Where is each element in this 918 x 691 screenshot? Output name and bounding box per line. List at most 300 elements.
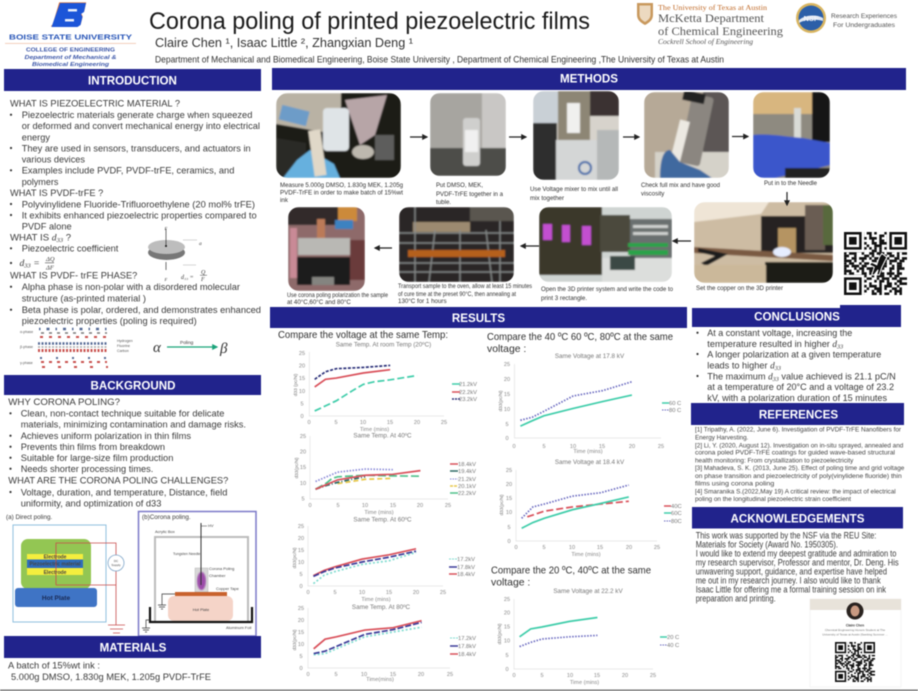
- chart: same voltage 17.8 kV: 5: [542, 444, 546, 450]
- chart: 60C voltage comparison: 17.8kV: [457, 565, 475, 571]
- diagram: corona poling: Aluminum Foil: [226, 625, 251, 630]
- chart: 80C voltage comparison: Time(mins): [366, 677, 394, 683]
- text: conclusions: A longer polarization at a given temperature: [707, 350, 881, 360]
- chart: 40C voltage comparison: Time (mins): [364, 510, 394, 516]
- text: background: WHY CORONA POLING?: [8, 397, 120, 408]
- diagram: corona poling: (b)Corona poling.: [142, 514, 191, 521]
- chart: 60C voltage comparison: 17.2kV: [457, 557, 475, 563]
- logo: Boise State University: Department of Mechanical &: [24, 55, 117, 61]
- text: introduction: 33: [56, 237, 64, 244]
- text: introduction: WHAT IS PVDF- trFE PHASE?: [10, 271, 137, 282]
- photo: printer software screen: [539, 207, 672, 282]
- chart: same voltage 22.2 kV: 5: [540, 673, 544, 679]
- diagram: d33 disk: F: [200, 277, 205, 283]
- diagram: corona poling: Tungsten Needle: [173, 552, 200, 556]
- chart: same voltage 22.2 kV: 10: [567, 673, 573, 679]
- chart: same voltage 22.2 kV: 40 C: [667, 643, 679, 649]
- heading: compare temperatures: [487, 332, 673, 355]
- heading: compare 20C and 40C: voltage :: [491, 578, 530, 588]
- chart: 20C voltage comparison: d33 (pc/N): [293, 373, 299, 396]
- program label: [831, 13, 898, 29]
- photo: syringe needle: [753, 92, 830, 178]
- text: acknowledgements: Isaac Little for offering me a formal training session on ink: [696, 584, 887, 594]
- chart: same voltage 17.8 kV: 60 C: [669, 401, 681, 407]
- chart: 20C voltage comparison: 20: [299, 364, 305, 370]
- chart: same voltage 18.4 kV: 5: [507, 525, 511, 531]
- text: introduction: d: [20, 258, 24, 269]
- text: conclusions: leads to higher d: [707, 360, 775, 370]
- chart: same voltage 18.4 kV: 80C: [671, 519, 682, 525]
- chart: same voltage 22.2 kV: 20: [622, 673, 628, 679]
- chart: 40C voltage comparison: 10: [300, 481, 306, 487]
- text: background: uniformity, and optimization of d33: [21, 498, 161, 509]
- chart: 40C voltage comparison: 5: [301, 496, 305, 502]
- text: introduction: Piezoelectric coefficient: [22, 244, 119, 255]
- diagram: direct poling: DC: [114, 559, 119, 563]
- chart: 40C voltage comparison: Same Temp. At 40ºC: [353, 432, 412, 440]
- chart: same voltage 22.2 kV: 15: [594, 673, 600, 679]
- heading: references: [691, 403, 904, 425]
- chart: 20C voltage comparison: 23.2kV: [459, 397, 477, 403]
- diagram: direct poling: Supply: [111, 563, 121, 567]
- text: background: Needs shorter processing times.: [21, 464, 153, 475]
- diagram: PVDF-TrFE molecular phases: Hydrogen: [117, 339, 133, 343]
- profile card: [810, 599, 901, 687]
- captions: process steps: ink: [280, 197, 289, 204]
- diagram: direct poling: (a) Direct poling.: [6, 514, 52, 521]
- chart: same voltage 18.4 kV: 20: [506, 482, 512, 488]
- heading: results: [270, 307, 687, 328]
- chart: 80C voltage comparison: [292, 604, 476, 683]
- text: materials: [8, 660, 211, 683]
- chart: same voltage 17.8 kV: 20: [504, 377, 510, 383]
- chart: 60C voltage comparison: 20: [413, 590, 419, 596]
- text: materials: 5.000g DMSO, 1.830g MEK, 1.205g PVDF-TrFE: [11, 672, 211, 683]
- chart: same voltage 17.8 kV: [498, 353, 681, 455]
- text: acknowledgements: This work was supported by the NSF via the REU Site:: [696, 530, 876, 540]
- text: introduction: structure (as-printed material ): [22, 294, 146, 305]
- chart: same voltage 17.8 kV: 20: [629, 444, 635, 450]
- text: introduction: WHAT IS PIEZOELECTRIC MATERIAL ?: [10, 99, 180, 110]
- heading: methods: METHODS: [560, 72, 618, 86]
- chart: same voltage 17.8 kV: 0: [505, 436, 509, 442]
- chart: same voltage 18.4 kV: [499, 459, 682, 558]
- chart: 40C voltage comparison: 18.4kV: [458, 462, 476, 468]
- chart: 20C voltage comparison: Same Temp. At room Temp (20ºC): [336, 342, 431, 348]
- captions: process steps: PVDF-TrFE together in a: [436, 191, 504, 198]
- photo: measuring materials: [276, 93, 401, 178]
- chart: 40C voltage comparison: 25: [300, 434, 306, 440]
- chart: 60C voltage comparison: 10: [298, 560, 304, 566]
- chart: 60C voltage comparison: 18.4kV: [457, 572, 475, 578]
- authors: Claire Chen ¹, Isaac Little ², Zhangxian Deng ¹: [155, 36, 413, 50]
- program label: For Undergraduates: [833, 22, 896, 29]
- heading: compare temperatures: Compare the 40 ºC 60 ºC, 80ºC at the same: [487, 332, 673, 343]
- photo: 3D printer setup: [694, 202, 833, 283]
- chart: 20C voltage comparison: [293, 342, 477, 433]
- chart: 20C voltage comparison: 10: [299, 389, 305, 395]
- profile card: Claire Chen: [846, 624, 864, 628]
- chart: 40C voltage comparison: 5: [336, 503, 340, 509]
- text: introduction: ?: [63, 232, 71, 243]
- text: conclusions: at a temperature of 20°C and a voltage of 23.2: [707, 382, 894, 392]
- chart: same voltage 18.4 kV: 5: [542, 545, 546, 551]
- arrow: alpha to beta: Poling: [180, 340, 194, 346]
- chart: same voltage 17.8 kV: 15: [599, 444, 605, 450]
- heading: conclusions: CONCLUSIONS: [754, 310, 840, 324]
- text: references: Energy Harvesting.: [695, 434, 748, 441]
- chart: same voltage 22.2 kV: 0: [512, 673, 516, 679]
- chart: same voltage 18.4 kV: 15: [597, 545, 603, 551]
- text: conclusions: temperature resulted in higher d: [707, 339, 837, 349]
- bottom edge: [0, 690, 918, 691]
- text: references: poling on the longitudinal piezoelectric strain coefficient: [695, 496, 851, 503]
- text: conclusions: The maximum d: [707, 372, 773, 382]
- title: Corona poling of printed piezoelectric films: [149, 8, 590, 35]
- text: conclusions: At a constant voltage, increasing the: [707, 328, 852, 338]
- chart: same voltage 22.2 kV: 25: [504, 597, 510, 603]
- chart: 40C voltage comparison: d33(pc/N): [294, 457, 300, 479]
- chart: 80C voltage comparison: 17.8kV: [458, 644, 476, 650]
- logo: UT McKetta Department: Cockrell School of Engineering: [658, 38, 754, 46]
- chart: 60C voltage comparison: 15: [298, 548, 304, 554]
- chart: same voltage 17.8 kV: 25: [504, 362, 510, 368]
- diagram: corona poling: Hot Plate: [193, 607, 210, 612]
- heading: conclusions: [692, 305, 901, 327]
- diagram: PVDF-TrFE molecular phases: γ-phase: [20, 361, 33, 365]
- text: introduction: WHAT IS PVDF-trFE ?: [10, 188, 103, 199]
- chart: 20C voltage comparison: 0: [300, 414, 304, 420]
- heading: acknowledgements: [692, 507, 903, 528]
- chart: same voltage 18.4 kV: 0: [514, 545, 518, 551]
- text: introduction: 33: [23, 262, 32, 270]
- text: background: Clean, non-contact technique suitable for delicate: [21, 409, 224, 420]
- text: references: health monitoring: From crystallization to piezoelectricity: [695, 457, 854, 464]
- diagram: corona poling: HV: [208, 523, 214, 528]
- logo: Boise State University: Biomedical Engineering: [32, 62, 110, 68]
- chart: 60C voltage comparison: 10: [359, 590, 365, 596]
- text: introduction: Beta phase is polar, ordered, and demonstrates enhanced: [22, 305, 261, 316]
- chart: 60C voltage comparison: [292, 516, 475, 603]
- diagram: PVDF-TrFE molecular phases: β-phase: [20, 345, 33, 349]
- text: introduction: polymers: [22, 177, 59, 188]
- diagram: direct poling: Piezoelectric material: [29, 562, 81, 568]
- chart: 60C voltage comparison: 5: [333, 590, 337, 596]
- chart: same voltage 18.4 kV: Time (mins): [571, 552, 601, 558]
- diagram: corona poling: Corona Poling: [209, 566, 234, 571]
- chart: 60C voltage comparison: 0: [306, 590, 310, 596]
- diagram: direct poling: Electrode: [44, 570, 67, 576]
- chart: same voltage 18.4 kV: 15: [506, 496, 512, 502]
- chart: same voltage 18.4 kV: 60C: [671, 511, 682, 517]
- chart: 80C voltage comparison: 10: [298, 642, 304, 648]
- diagram: d33 disk: a: [199, 241, 202, 247]
- logo: UT McKetta Department: The University of Texas at Austin: [658, 4, 768, 12]
- QR code: methods: [843, 231, 908, 296]
- chart: same voltage 17.8 kV: 5: [505, 422, 509, 428]
- text: background: [8, 397, 246, 509]
- diagram: PVDF-TrFE molecular phases: Fluorine: [117, 344, 130, 348]
- chart: 20C voltage comparison: 0: [307, 420, 311, 426]
- heading: materials: [4, 636, 261, 658]
- chart: same voltage 17.8 kV: d33(pc/N): [498, 390, 504, 412]
- captions: process steps: at 40°C,60°C and 80°C: [287, 299, 351, 306]
- diagram: PVDF-TrFE molecular phases: α-phase: [20, 330, 33, 334]
- text: conclusions: 33: [774, 365, 781, 372]
- captions: process steps: Measure 5.000g DMSO, 1.830g MEK, 1.205g: [280, 182, 404, 189]
- chart: 20C voltage comparison: 15: [299, 376, 305, 382]
- text: background: WHAT ARE THE CORONA POLING CHALLENGES?: [8, 475, 228, 486]
- chart: same voltage 22.2 kV: d33(pc/N): [497, 623, 503, 645]
- text: conclusions: 33: [772, 376, 779, 383]
- captions: process steps: Check full mix and have good: [641, 182, 721, 189]
- text: introduction: [10, 99, 261, 327]
- text: background: Prevents thin films from breakdown: [21, 442, 165, 453]
- captions: process steps: PVDF-TrFE in order to make batch of 15%wt: [280, 190, 403, 196]
- text: introduction: It exhibits enhanced piezoelectric properties compared to: [22, 210, 257, 221]
- text: introduction: WHAT IS d: [10, 232, 57, 243]
- diagram: corona poling: Acrylic Box: [155, 529, 175, 534]
- text: introduction: Polyvinylidene Fluoride-Trifluoroethylene (20 mol% trFE): [22, 199, 255, 210]
- profile card: University of Texas at Austin |Seeking Summer ...: [822, 632, 888, 636]
- text: references: [4] Smaranika S.(2022,May 19) A critical review: the impact of electrical: [695, 488, 896, 495]
- chart: 80C voltage comparison: Same Temp. At 80ºC: [352, 604, 411, 611]
- text: acknowledgements: me out in my research journey. I also would like to thank: [696, 575, 881, 585]
- captions: process steps: Put in to the Needle: [764, 180, 818, 187]
- text: introduction: =: [31, 258, 40, 269]
- chart: same voltage 17.8 kV: 15: [504, 392, 510, 398]
- photo: voltage mixer: [533, 91, 619, 180]
- chart: same voltage 18.4 kV: Same Voltage at 18.4 kV: [555, 459, 625, 466]
- profile card: Chemical Engineering Honors Student at The: [825, 628, 885, 632]
- photo: oven annealing: [399, 207, 514, 282]
- chart: 60C voltage comparison: Time (mins): [361, 597, 391, 603]
- diagram: corona poling: [138, 512, 256, 636]
- heading: results: RESULTS: [452, 312, 505, 325]
- text: introduction: Alpha phase is non-polar with a disordered molecular: [22, 282, 241, 293]
- chart: same voltage 22.2 kV: 10: [504, 638, 510, 644]
- chart: 40C voltage comparison: 20.1kV: [458, 484, 476, 490]
- chart: 40C voltage comparison: 25: [445, 503, 451, 509]
- chart: same voltage 18.4 kV: 10: [569, 545, 575, 551]
- chart: same voltage 17.8 kV: 0: [512, 444, 516, 450]
- chart: 40C voltage comparison: [294, 432, 476, 516]
- text: references: films using corona poling: [695, 481, 775, 488]
- diagram: direct poling: [6, 514, 125, 633]
- chart: same voltage 22.2 kV: 0: [505, 667, 509, 673]
- captions: process steps: viscosity: [641, 190, 665, 198]
- heading: materials: MATERIALS: [100, 642, 167, 654]
- arrow: alpha to beta: α: [153, 340, 162, 356]
- chart: 80C voltage comparison: 17.2kV: [458, 636, 476, 642]
- heading: compare 20C and 40C: Compare the 20 ºC, 40ºC at the same: [491, 566, 651, 576]
- text: introduction: or deformed and convert mechanical energy into electrical: [22, 121, 260, 132]
- text: background: Voltage, duration, and temperature, Distance, field: [21, 487, 227, 498]
- chart: same voltage 22.2 kV: 5: [505, 653, 509, 659]
- chart: same voltage 18.4 kV: 20: [626, 545, 632, 551]
- chart: 80C voltage comparison: 25: [298, 606, 304, 612]
- photo: bottle in fume hood: [430, 93, 506, 176]
- chart: 40C voltage comparison: 21.2kV: [458, 477, 476, 483]
- captions: process steps: Open the 3D printer system and write the code to: [541, 286, 674, 293]
- arrow: alpha to beta: [153, 340, 228, 357]
- text: acknowledgements: unwavering support, guidance, and expertise have helped: [696, 566, 887, 576]
- text: acknowledgements: Materials for Society (Award No. 1950305).: [696, 539, 838, 549]
- arrows: process flow: [375, 136, 787, 248]
- arrow: alpha to beta: β: [219, 341, 228, 357]
- text: introduction: ΔF: [45, 264, 55, 272]
- chart: same voltage 22.2 kV: 15: [504, 624, 510, 630]
- chart: 60C voltage comparison: 15: [386, 590, 392, 596]
- text: introduction: ΔQ: [45, 256, 55, 263]
- chart: 80C voltage comparison: 15: [298, 630, 304, 636]
- captions: process steps: Put DMSO, MEK,: [436, 182, 483, 189]
- chart: 80C voltage comparison: 25: [447, 672, 453, 678]
- captions: process steps: [280, 180, 818, 306]
- diagram: d33 disk: F: [164, 277, 168, 282]
- chart: 40C voltage comparison: 15: [300, 465, 306, 471]
- chart: same voltage 18.4 kV: 40C: [671, 504, 682, 510]
- logo: Boise State University: BOISE STATE UNIVERSITY: [9, 33, 132, 42]
- text: acknowledgements: [696, 530, 899, 603]
- chart: 20C voltage comparison: 10: [360, 420, 366, 426]
- diagram: d33 disk: Q: [201, 270, 206, 276]
- chart: same voltage 22.2 kV: Same Voltage at 22.2 kV: [553, 588, 623, 595]
- text: references: [1] Tripathy, A. (2022, June 6). Investigation of PVDF-TrFE Nanofibers for: [695, 426, 902, 433]
- chart: 40C voltage comparison: 20: [300, 450, 306, 456]
- chart: 40C voltage comparison: 20: [417, 503, 423, 509]
- chart: 20C voltage comparison: 25: [441, 420, 447, 426]
- chart: same voltage 18.4 kV: 25: [654, 545, 660, 551]
- chart: 60C voltage comparison: 0: [299, 584, 303, 590]
- heading: acknowledgements: ACKNOWLEDGEMENTS: [731, 512, 865, 526]
- chart: same voltage 17.8 kV: 10: [504, 407, 510, 413]
- text: introduction: Examples include PVDF, PVDF-trFE, ceramics, and: [22, 166, 234, 177]
- text: introduction: They are used in sensors, transducers, and actuators in: [22, 143, 251, 154]
- text: background: materials, minimizing contamination and damage risks.: [21, 420, 246, 431]
- text: introduction: various devices: [22, 154, 85, 165]
- chart: same voltage 18.4 kV: 0: [507, 539, 511, 545]
- captions: process steps: 130°C for 1 hours: [398, 298, 447, 305]
- chart: 80C voltage comparison: 15: [390, 672, 396, 678]
- diagram: corona poling: Chamber: [209, 573, 226, 578]
- chart: 60C voltage comparison: 25: [440, 590, 446, 596]
- chart: 40C voltage comparison: 0: [308, 503, 312, 509]
- heading: background: BACKGROUND: [90, 380, 176, 392]
- chart: 20C voltage comparison: 22.2kV: [459, 390, 477, 396]
- text: introduction: piezoelectric properties (poling is required): [22, 316, 197, 327]
- chart: same voltage 18.4 kV: 10: [506, 510, 512, 516]
- captions: process steps: Set the copper on the 3D printer: [696, 285, 783, 292]
- photo: corona poling setup: [288, 207, 365, 291]
- diagram: d33 disk: d₃₃ =: [181, 275, 194, 281]
- text: references: corona poled PVDF-TrFE coatings for guided wave-based structural: [695, 450, 896, 457]
- chart: 40C voltage comparison: 22.2kV: [458, 491, 476, 497]
- heading: methods: [272, 68, 906, 90]
- chart: same voltage 22.2 kV: Time (mins): [570, 680, 599, 686]
- diagram: d33 disk: F: [164, 226, 168, 231]
- diagram: PVDF-TrFE molecular phases: Carbon: [117, 349, 129, 353]
- text: references: [2] Li, Y. (2020, August 12). Investigation on in-situ sprayed, annealed and: [695, 442, 904, 449]
- chart: 80C voltage comparison: 18.4kV: [458, 652, 476, 658]
- captions: process steps: of cure time at the preset 90°C, then annealing at: [398, 291, 516, 298]
- program label: Research Experiences: [831, 13, 898, 20]
- chart: 40C voltage comparison: 10: [362, 503, 368, 509]
- text: acknowledgements: preparation and printing.: [696, 593, 776, 603]
- heading: background: [4, 375, 261, 395]
- chart: 20C voltage comparison: 21.2kV: [459, 382, 477, 388]
- chart: 40C voltage comparison: 15: [390, 503, 396, 509]
- text: conclusions: [696, 328, 896, 403]
- chart: 20C voltage comparison: 20: [414, 420, 420, 426]
- diagram: direct poling: Hot Plate: [42, 595, 70, 602]
- chart: 20C voltage comparison: 25: [299, 351, 305, 357]
- captions: process steps: print 3 rectangle.: [541, 295, 587, 302]
- chart: 20C voltage comparison: Time (mins): [360, 427, 389, 433]
- logo: Boise State University: [5, 2, 136, 68]
- logo: UT McKetta Department: of Chemical Engineering: [658, 26, 783, 38]
- chart: same voltage 22.2 kV: 25: [650, 673, 656, 679]
- text: references: [695, 426, 905, 503]
- chart: 60C voltage comparison: 5: [299, 572, 303, 578]
- chart: 80C voltage comparison: 20: [298, 618, 304, 624]
- chart: 80C voltage comparison: d33(pc/N): [292, 629, 298, 651]
- captions: process steps: mix together: [530, 195, 564, 202]
- heading: introduction: [4, 69, 261, 91]
- heading: compare voltage: Compare the voltage at the same Temp:: [278, 330, 448, 341]
- text: introduction: Piezoelectric materials generate charge when squeezed: [22, 110, 252, 121]
- chart: 20C voltage comparison: 15: [387, 420, 393, 426]
- chart: same voltage 17.8 kV: 10: [570, 444, 576, 450]
- text: references: on phase transition and piezoelectricity of poly(vinylidene fluoride) thin: [695, 473, 902, 480]
- heading: introduction: INTRODUCTION: [88, 74, 177, 88]
- heading: compare 20C and 40C: [491, 566, 651, 588]
- chart: same voltage 17.8 kV: Same Voltage at 17.8 kV: [555, 353, 625, 360]
- chart: same voltage 17.8 kV: 80 C: [669, 408, 681, 414]
- text: introduction: PVDF alone: [22, 221, 72, 232]
- chart: 80C voltage comparison: 0: [299, 666, 303, 672]
- chart: 20C voltage comparison: 5: [300, 402, 304, 408]
- chart: same voltage 17.8 kV: 25: [658, 444, 664, 450]
- captions: process steps: tuble.: [436, 199, 451, 206]
- chart: 80C voltage comparison: 0: [306, 672, 310, 678]
- heading: references: REFERENCES: [759, 408, 838, 422]
- chart: 60C voltage comparison: 20: [298, 536, 304, 542]
- text: background: Suitable for large-size film production: [21, 453, 173, 464]
- chart: same voltage 17.8 kV: Time (mins): [573, 449, 603, 455]
- logo: UT McKetta Department: McKetta Department: [658, 13, 765, 25]
- text: introduction: energy: [22, 132, 50, 143]
- chart: 60C voltage comparison: Same Temp. At 60ºC: [353, 516, 412, 524]
- text: background: Achieves uniform polarization in thin films: [21, 431, 191, 442]
- photo: viscosity check: [644, 90, 729, 178]
- diagram: direct poling: Electrode: [44, 554, 67, 560]
- chart: 80C voltage comparison: 10: [361, 672, 367, 678]
- diagram: corona poling: Copper Tape: [216, 586, 240, 591]
- chart: same voltage 22.2 kV: [497, 588, 679, 686]
- chart: 60C voltage comparison: d33(pc/N): [292, 547, 298, 569]
- captions: process steps: Use Voltage mixer to mix until all: [530, 186, 618, 193]
- text: materials: A batch of 15%wt ink :: [8, 660, 100, 671]
- chart: same voltage 18.4 kV: 25: [506, 468, 512, 474]
- text: references: [3] Mahadeva, S. K. (2013, June 25). Effect of poling time and grid voltage: [695, 465, 905, 472]
- text: conclusions: 33: [836, 343, 843, 350]
- chart: 40C voltage comparison: 19.4kV: [458, 469, 476, 475]
- chart: 80C voltage comparison: 5: [334, 672, 338, 678]
- text: conclusions: value achieved is 21.1 pC/N: [779, 372, 896, 382]
- chart: 60C voltage comparison: 25: [298, 524, 304, 530]
- chart: 80C voltage comparison: 20: [418, 672, 424, 678]
